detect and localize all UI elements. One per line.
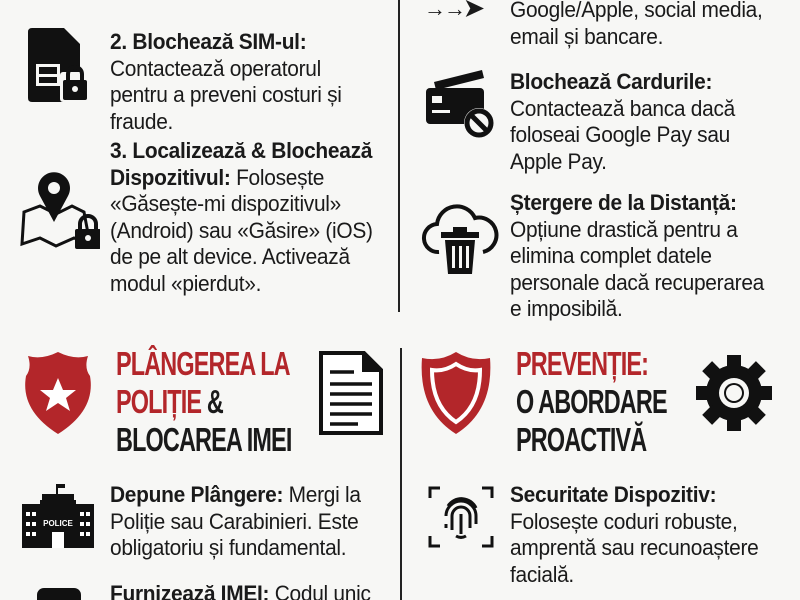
text: localizeaza: «Găsește-mi dispozitivul» bbox=[110, 191, 341, 216]
icon: card blocked bbox=[426, 70, 494, 138]
icon: fingerprint bbox=[428, 486, 494, 548]
text: remote wipe bbox=[510, 190, 764, 321]
icon: phone bbox=[37, 588, 81, 600]
icon: gear bbox=[696, 355, 772, 431]
text: localizeaza: 3. Localizează & Blochează bbox=[110, 138, 372, 163]
text: remote wipe: Opțiune drastică pentru a bbox=[510, 216, 738, 242]
text: depune plangere: obligatoriu și fundamental. bbox=[110, 535, 346, 560]
text: cards: Apple Pay. bbox=[510, 148, 607, 174]
icon: red shield bbox=[422, 352, 490, 434]
text: cards: Contactează banca dacă bbox=[510, 96, 735, 120]
icon: cloud trash bbox=[422, 204, 498, 274]
heading: preventie: O ABORDARE bbox=[516, 383, 667, 420]
icon: document bbox=[319, 351, 383, 435]
text: blocheaza sim bbox=[110, 29, 342, 134]
icon: police badge bbox=[25, 352, 91, 434]
heading: plangerea la politie bbox=[116, 345, 292, 458]
heading: plangerea la politie: POLIȚIE & bbox=[116, 383, 223, 420]
heading: plangerea la politie: PLÂNGEREA LA bbox=[116, 345, 290, 382]
text: depune plangere bbox=[110, 482, 361, 560]
text: accounts bbox=[510, 0, 763, 48]
icon: police building bbox=[22, 484, 94, 548]
heading: preventie: PROACTIVĂ bbox=[516, 421, 646, 458]
text: remote wipe: e imposibilă. bbox=[510, 296, 622, 321]
text: cards: foloseai Google Pay sau bbox=[510, 122, 730, 147]
text: remote wipe: personale dacă recuperarea bbox=[510, 270, 764, 294]
heading: plangerea la politie: BLOCAREA IMEI bbox=[116, 421, 292, 458]
text: securitate dispozitiv: amprentă sau recunoaștere bbox=[510, 535, 758, 560]
icon: sim lock bbox=[28, 28, 87, 102]
text: securitate dispozitiv: Securitate Dispozitiv: bbox=[510, 482, 716, 507]
text: remote wipe: elimina complet datele bbox=[510, 243, 712, 268]
icon: map pin lock bbox=[20, 172, 100, 249]
text: accounts: email și bancare. bbox=[510, 24, 663, 48]
text: localizeaza: (Android) sau «Găsire» (iOS) bbox=[110, 218, 373, 242]
text: securitate dispozitiv: facială. bbox=[510, 562, 574, 586]
text: blocheaza sim: pentru a preveni costuri și bbox=[110, 82, 342, 107]
text: depune plangere: Depune Plângere: Mergi la bbox=[110, 482, 361, 507]
text: cards: Blochează Cardurile: bbox=[510, 69, 712, 94]
text: localizeaza bbox=[110, 138, 373, 296]
heading: preventie bbox=[516, 345, 667, 458]
text: localizeaza: Dispozitivul: Folosește bbox=[110, 164, 324, 190]
text: depune plangere: Poliție sau Carabinieri. Este bbox=[110, 508, 358, 534]
text: remote wipe: Ștergere de la Distanță: bbox=[510, 190, 737, 215]
text: blocheaza sim: 2. Blochează SIM-ul: bbox=[110, 29, 306, 54]
text: localizeaza: de pe alt device. Activează bbox=[110, 244, 350, 269]
text: blocheaza sim: Contactează operatorul bbox=[110, 56, 321, 80]
text: cards bbox=[510, 69, 736, 174]
text: localizeaza: modul «pierdut». bbox=[110, 270, 261, 296]
text: securitate dispozitiv: Folosește coduri robuste, bbox=[510, 508, 738, 534]
text: blocheaza sim: fraude. bbox=[110, 108, 173, 134]
heading: preventie: PREVENȚIE: bbox=[516, 345, 648, 382]
icon: police building: POLICE bbox=[43, 519, 74, 528]
text: securitate dispozitiv bbox=[510, 482, 758, 586]
